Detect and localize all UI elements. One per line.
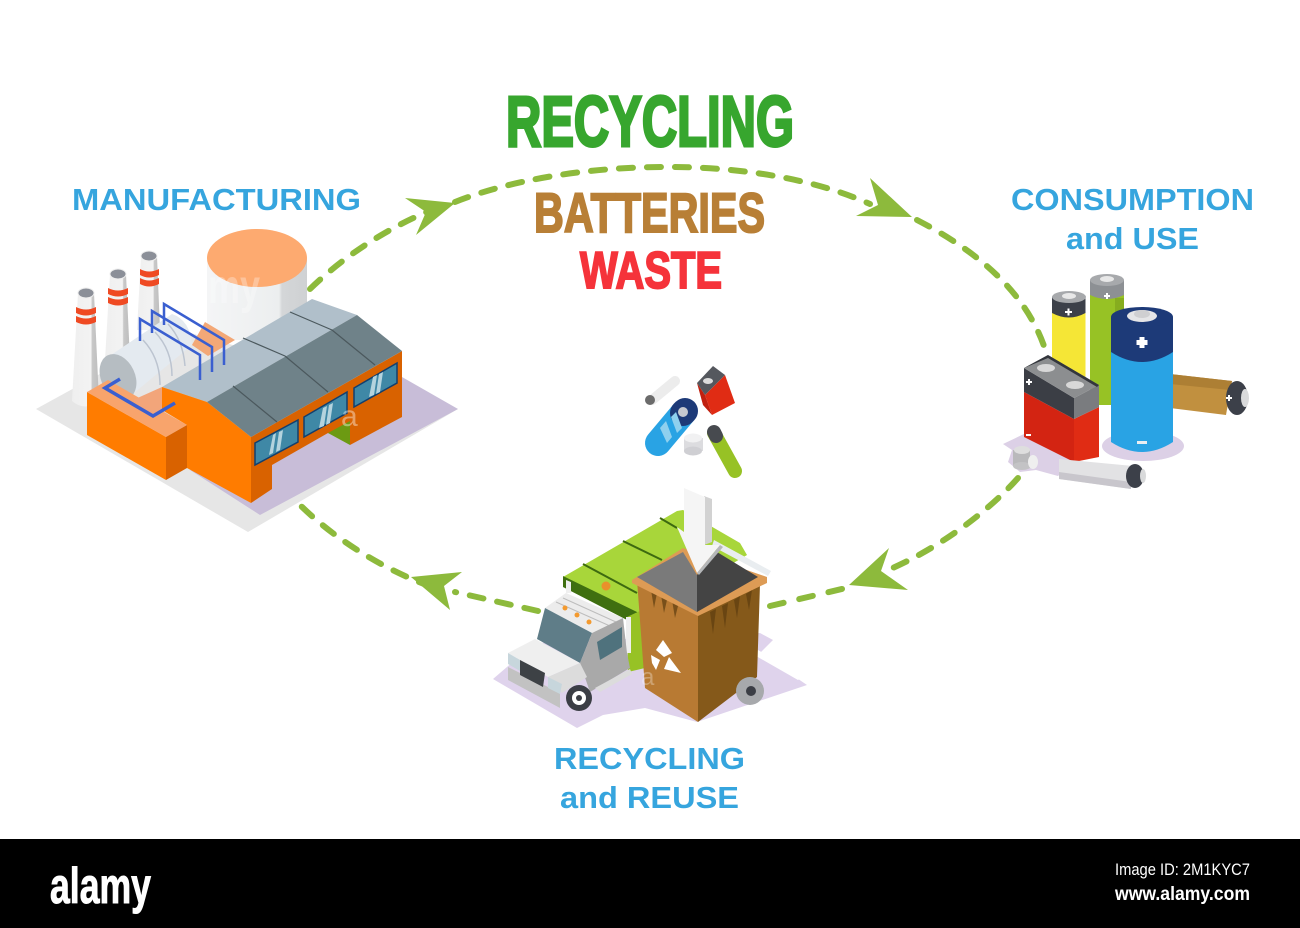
bin rim drips	[651, 590, 752, 634]
bin handle bar	[712, 540, 771, 576]
label: recycling and reuse	[554, 741, 745, 815]
container side light	[627, 610, 645, 672]
pale panel under drum	[133, 387, 162, 417]
illustration: factory	[36, 229, 458, 532]
recycle symbol	[651, 640, 681, 673]
ground plate	[36, 330, 458, 532]
roof stripes	[556, 598, 616, 626]
cab roof lights	[562, 606, 592, 624]
door step	[595, 669, 632, 692]
dashed line: factory to title	[310, 203, 450, 289]
illustration: falling batteries	[645, 366, 735, 471]
big blue battery	[1111, 307, 1173, 452]
watermark fragment on tank: my	[208, 261, 260, 314]
dashed line: batteries to bin	[888, 478, 1018, 570]
watermark fragment on bin: a	[641, 664, 655, 691]
label: manufacturing: MANUFACTURING	[72, 182, 361, 217]
white road marking	[756, 650, 803, 680]
coins small	[684, 434, 703, 456]
label: consumption and use	[1011, 182, 1254, 256]
bin wheel	[736, 677, 764, 705]
side window	[597, 627, 622, 660]
bin opening left	[637, 552, 697, 612]
dashed line: truck to arrowhead	[455, 592, 538, 611]
bin opening right	[697, 552, 758, 612]
base lavender	[493, 633, 807, 728]
footer website: www.alamy.com	[1114, 884, 1250, 905]
drum tank	[92, 314, 192, 406]
arrowhead: bottom left	[411, 572, 462, 610]
illustration: garbage truck and bin	[493, 488, 807, 728]
yellow battery	[1052, 291, 1086, 379]
ground shadow	[190, 377, 458, 515]
white drop arrow	[677, 488, 723, 575]
small blue battery	[658, 407, 688, 443]
dashed line: top arc	[455, 167, 870, 204]
gable roof light side	[162, 299, 357, 402]
coin cells	[1013, 446, 1038, 470]
title: recycling: RECYCLING	[506, 83, 794, 162]
footer image id: Image ID: 2M1KYC7	[1115, 860, 1250, 879]
white posts	[566, 580, 631, 653]
white battery lying	[1059, 459, 1146, 489]
dashed line: bin to arrowhead	[770, 588, 846, 606]
left headlight	[508, 653, 520, 671]
label: recycling and reuse: and REUSE	[560, 780, 739, 815]
bin left face	[637, 580, 698, 722]
amber beacon	[602, 582, 610, 590]
cab roof	[545, 593, 623, 633]
9 volt battery	[1024, 355, 1099, 462]
footer bar	[0, 839, 1300, 928]
arrowhead: top right	[856, 178, 912, 217]
small white battery	[645, 381, 675, 405]
dashed line: to factory	[298, 503, 432, 587]
fender	[548, 663, 587, 693]
illustration: batteries group	[1003, 274, 1249, 489]
door	[328, 421, 350, 445]
bin rim	[632, 548, 767, 616]
brown battery	[1170, 374, 1249, 415]
truck container top	[563, 510, 747, 618]
small 9 volt battery	[697, 366, 735, 415]
window glare	[269, 372, 383, 455]
arrowhead: bottom right	[849, 548, 908, 590]
container dark band	[563, 576, 637, 620]
wing top deck	[87, 380, 187, 437]
subtitle: batteries: BATTERIES	[534, 181, 765, 244]
cycle: dashed arrows	[298, 167, 1046, 611]
chimneys	[72, 251, 160, 406]
subtitle: waste: WASTE	[580, 242, 722, 300]
green battery	[1090, 274, 1124, 405]
right headlight	[548, 677, 562, 694]
arrowhead: top left	[405, 198, 455, 235]
label: consumption and use: and USE	[1066, 221, 1199, 256]
watermark fragment on factory: a	[341, 400, 358, 433]
dark roof	[207, 315, 402, 437]
main wall side with windows	[251, 351, 402, 503]
small green battery	[714, 432, 735, 471]
hood	[508, 639, 580, 677]
roof seams	[233, 312, 375, 422]
shadow under batteries	[1003, 434, 1074, 476]
truck front	[508, 667, 560, 708]
orange left wing front	[87, 392, 166, 480]
wing side	[166, 425, 187, 480]
bin right face	[698, 584, 760, 722]
truck wheel	[566, 685, 592, 711]
storage tank	[207, 229, 307, 340]
label: recycling and reuse: RECYCLING	[554, 741, 745, 776]
grille	[520, 660, 545, 687]
footer logo: alamy	[50, 858, 151, 914]
windshield	[537, 608, 592, 663]
main wall gable	[162, 387, 251, 503]
blue pipes	[105, 304, 224, 416]
container seams	[583, 518, 677, 593]
door panel	[580, 618, 630, 692]
windows	[255, 363, 397, 465]
tan courtyard strip	[192, 322, 235, 356]
shadow under blue battery	[1102, 431, 1184, 461]
label: consumption and use: CONSUMPTION	[1011, 182, 1254, 217]
dashed line: to batteries	[917, 220, 1046, 352]
